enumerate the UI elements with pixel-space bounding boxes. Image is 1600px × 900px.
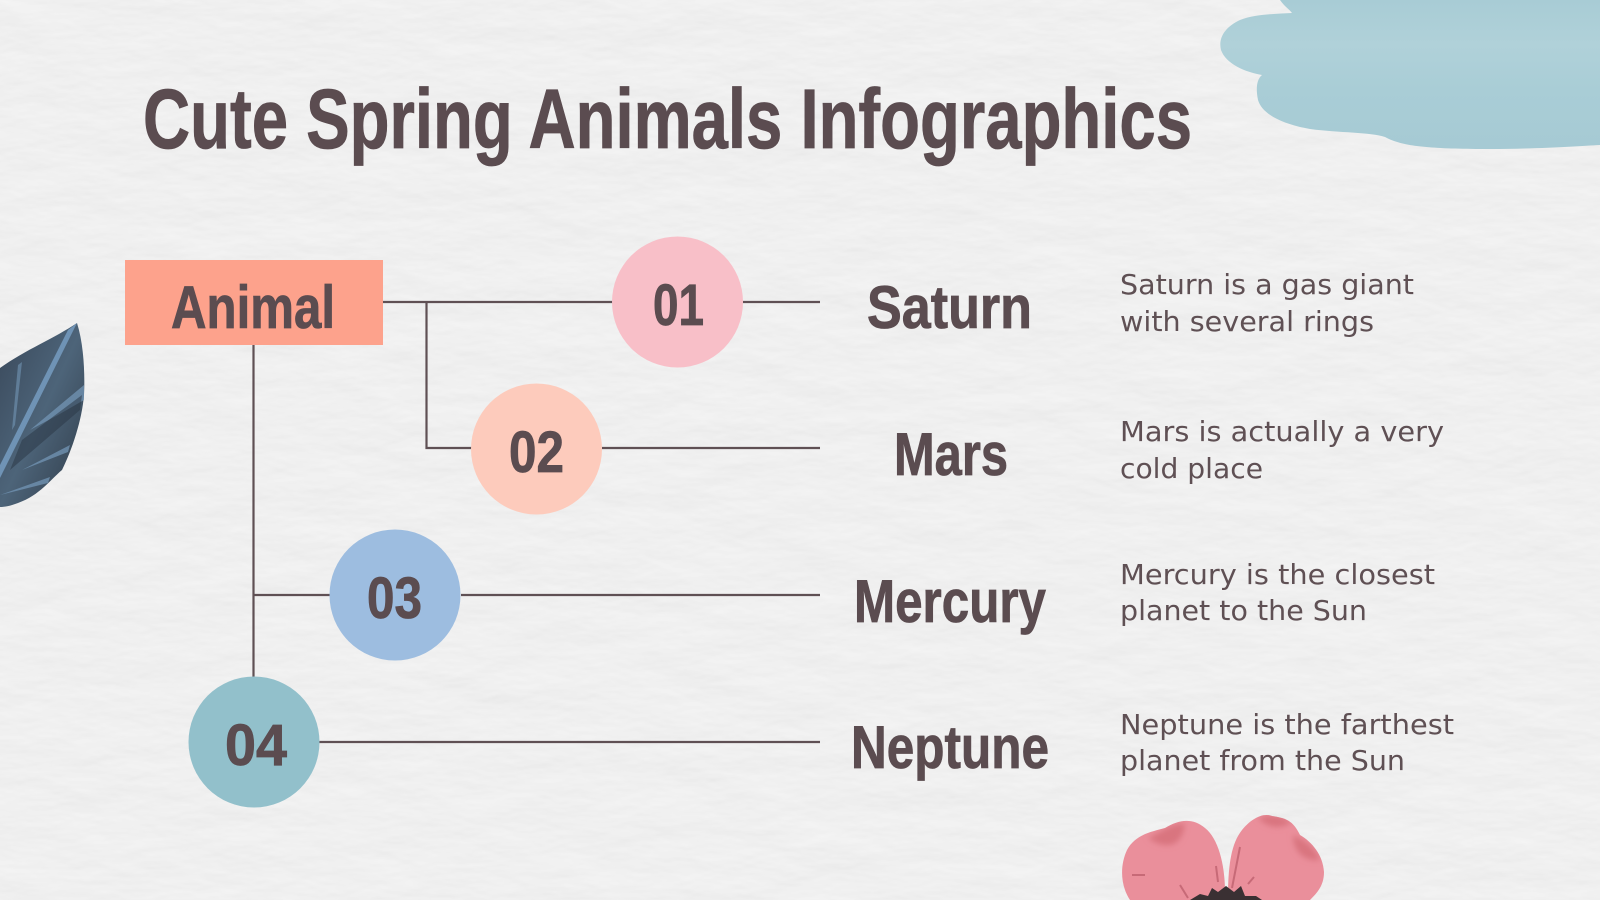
label: Mercury: Mercury	[854, 568, 1047, 635]
description: Neptune	[1120, 708, 1454, 777]
node 04	[188, 676, 320, 808]
description: Mars	[1120, 415, 1444, 485]
description: Mars: Mars is actually a very	[1120, 415, 1444, 448]
node 03: 03	[367, 566, 422, 631]
decoration: pink flower	[1122, 815, 1324, 900]
node 01: 01	[653, 273, 704, 338]
node 04: 04	[225, 713, 287, 778]
decoration: dark blue leaf	[0, 323, 84, 507]
label: Neptune: Neptune	[851, 714, 1049, 781]
node 02	[471, 384, 602, 514]
description: Mercury: Mercury is the closest	[1120, 558, 1435, 591]
label: Mars: Mars	[894, 421, 1008, 488]
root box: Animal	[125, 260, 383, 345]
node 03	[330, 530, 460, 660]
connector lines	[254, 302, 820, 742]
root box: Animal: Animal	[171, 274, 335, 341]
description: Mars: cold place	[1120, 452, 1263, 485]
node 01	[612, 236, 743, 368]
description: Neptune: planet from the Sun	[1120, 744, 1405, 777]
title: Cute Spring Animals Infographics	[143, 72, 1192, 166]
description: Mercury: planet to the Sun	[1120, 594, 1367, 627]
node 02: 02	[509, 420, 564, 485]
label: Saturn: Saturn	[867, 274, 1032, 341]
description: Mercury	[1120, 558, 1435, 627]
description: Neptune: Neptune is the farthest	[1120, 708, 1454, 741]
description: Saturn: with several rings	[1120, 305, 1374, 338]
decoration: blue watercolor blob	[1220, 0, 1600, 149]
description: Saturn: Saturn is a gas giant	[1120, 268, 1414, 301]
description: Saturn	[1120, 268, 1414, 338]
